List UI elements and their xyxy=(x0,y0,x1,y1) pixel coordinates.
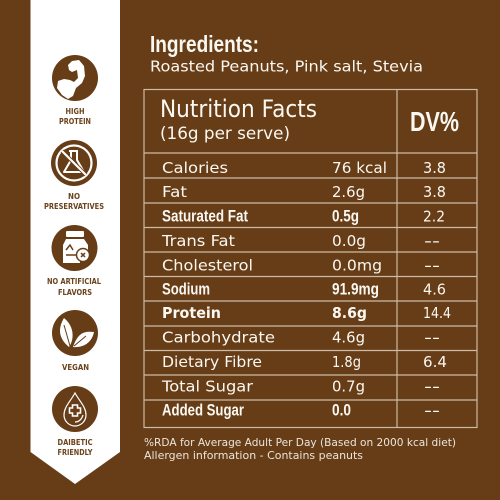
row: saturated fat: 2.2 xyxy=(423,208,445,226)
row: sodium: Sodium xyxy=(162,280,210,298)
icon: no artificial flavors bottle xyxy=(52,225,98,271)
label: diabetic friendly xyxy=(58,438,93,457)
row: calories: Calories xyxy=(162,159,228,177)
label: no preservatives: PRESERVATIVES xyxy=(44,202,104,211)
label: high protein: HIGH xyxy=(66,107,84,116)
row: dietary fibre: 6.4 xyxy=(423,353,447,371)
row: trans fat: Trans Fat xyxy=(161,232,235,250)
row: carbohydrate: -- xyxy=(424,329,440,347)
row: dietary fibre: Dietary Fibre xyxy=(162,353,262,371)
row: added sugar xyxy=(162,402,440,420)
nutrition table xyxy=(144,90,477,428)
icon: vegan leaves xyxy=(52,310,98,356)
label: no preservatives: NO xyxy=(68,192,81,201)
row: trans fat: -- xyxy=(424,232,440,250)
row: protein: 8.6g xyxy=(332,304,367,322)
label: no artificial flavors xyxy=(47,277,101,297)
row: carbohydrate xyxy=(162,329,440,347)
label: no artificial flavors: NO ARTIFICIAL xyxy=(47,277,101,286)
row: total sugar xyxy=(161,378,440,396)
row: saturated fat: Saturated Fat xyxy=(162,208,248,226)
row: cholesterol xyxy=(162,256,440,274)
row: trans fat xyxy=(161,232,440,250)
row: trans fat: 0.0g xyxy=(332,232,366,250)
row: cholesterol: 0.0mg xyxy=(332,256,382,274)
row: fat: Fat xyxy=(162,183,187,201)
row: fat: 2.6g xyxy=(332,183,365,201)
label: no artificial flavors: FLAVORS xyxy=(58,288,92,297)
label: no preservatives xyxy=(44,192,104,211)
label: diabetic friendly: DAIBETIC xyxy=(58,438,93,447)
footnote: rda: %RDA for Average Adult Per Day (Based on 2000 kcal diet) xyxy=(144,437,456,449)
row: added sugar: 0.0 xyxy=(332,402,351,420)
row: carbohydrate: Carbohydrate xyxy=(162,329,275,347)
table heading: (16g per serve) xyxy=(160,124,290,144)
footnote: allergen: Allergen information - Contains peanuts xyxy=(144,450,363,462)
icon: high protein muscle xyxy=(52,55,98,101)
row: calories: 76 kcal xyxy=(332,159,387,177)
row: protein xyxy=(162,304,451,322)
label: diabetic friendly: FRIENDLY xyxy=(58,448,93,457)
row: protein: 14.4 xyxy=(423,304,451,322)
row: protein: Protein xyxy=(162,304,221,322)
table heading: Nutrition Facts xyxy=(160,95,317,123)
row: carbohydrate: 4.6g xyxy=(332,329,365,347)
row: sodium: 4.6 xyxy=(423,280,446,298)
row: cholesterol: -- xyxy=(424,256,440,274)
row: calories: 3.8 xyxy=(423,159,446,177)
row: added sugar: -- xyxy=(424,402,440,420)
row: saturated fat: 0.5g xyxy=(332,208,359,226)
row: total sugar: 0.7g xyxy=(332,378,365,396)
row: sodium: 91.9mg xyxy=(332,280,379,298)
row: total sugar: Total Sugar xyxy=(161,378,254,396)
row: fat xyxy=(162,183,446,201)
row: sodium xyxy=(162,280,446,298)
row: cholesterol: Cholesterol xyxy=(162,256,253,274)
ingredients text: Roasted Peanuts, Pink salt, Stevia xyxy=(150,58,423,76)
ribbon banner xyxy=(30,0,120,484)
table heading xyxy=(160,95,317,144)
label: high protein xyxy=(59,107,91,126)
row: fat: 3.8 xyxy=(423,183,446,201)
DV% heading: DV% xyxy=(410,106,459,137)
row: dietary fibre xyxy=(162,353,447,371)
row: saturated fat xyxy=(162,208,445,226)
row: total sugar: -- xyxy=(424,378,440,396)
row: dietary fibre: 1.8g xyxy=(332,353,361,371)
ingredients heading: Ingredients: xyxy=(150,31,259,57)
label: high protein: PROTEIN xyxy=(59,117,91,126)
row: added sugar: Added Sugar xyxy=(162,402,244,420)
label: vegan: VEGAN xyxy=(62,363,89,372)
row: calories xyxy=(162,159,446,177)
icon: no preservatives flask xyxy=(51,140,97,186)
icon: diabetic friendly drop xyxy=(52,386,98,432)
